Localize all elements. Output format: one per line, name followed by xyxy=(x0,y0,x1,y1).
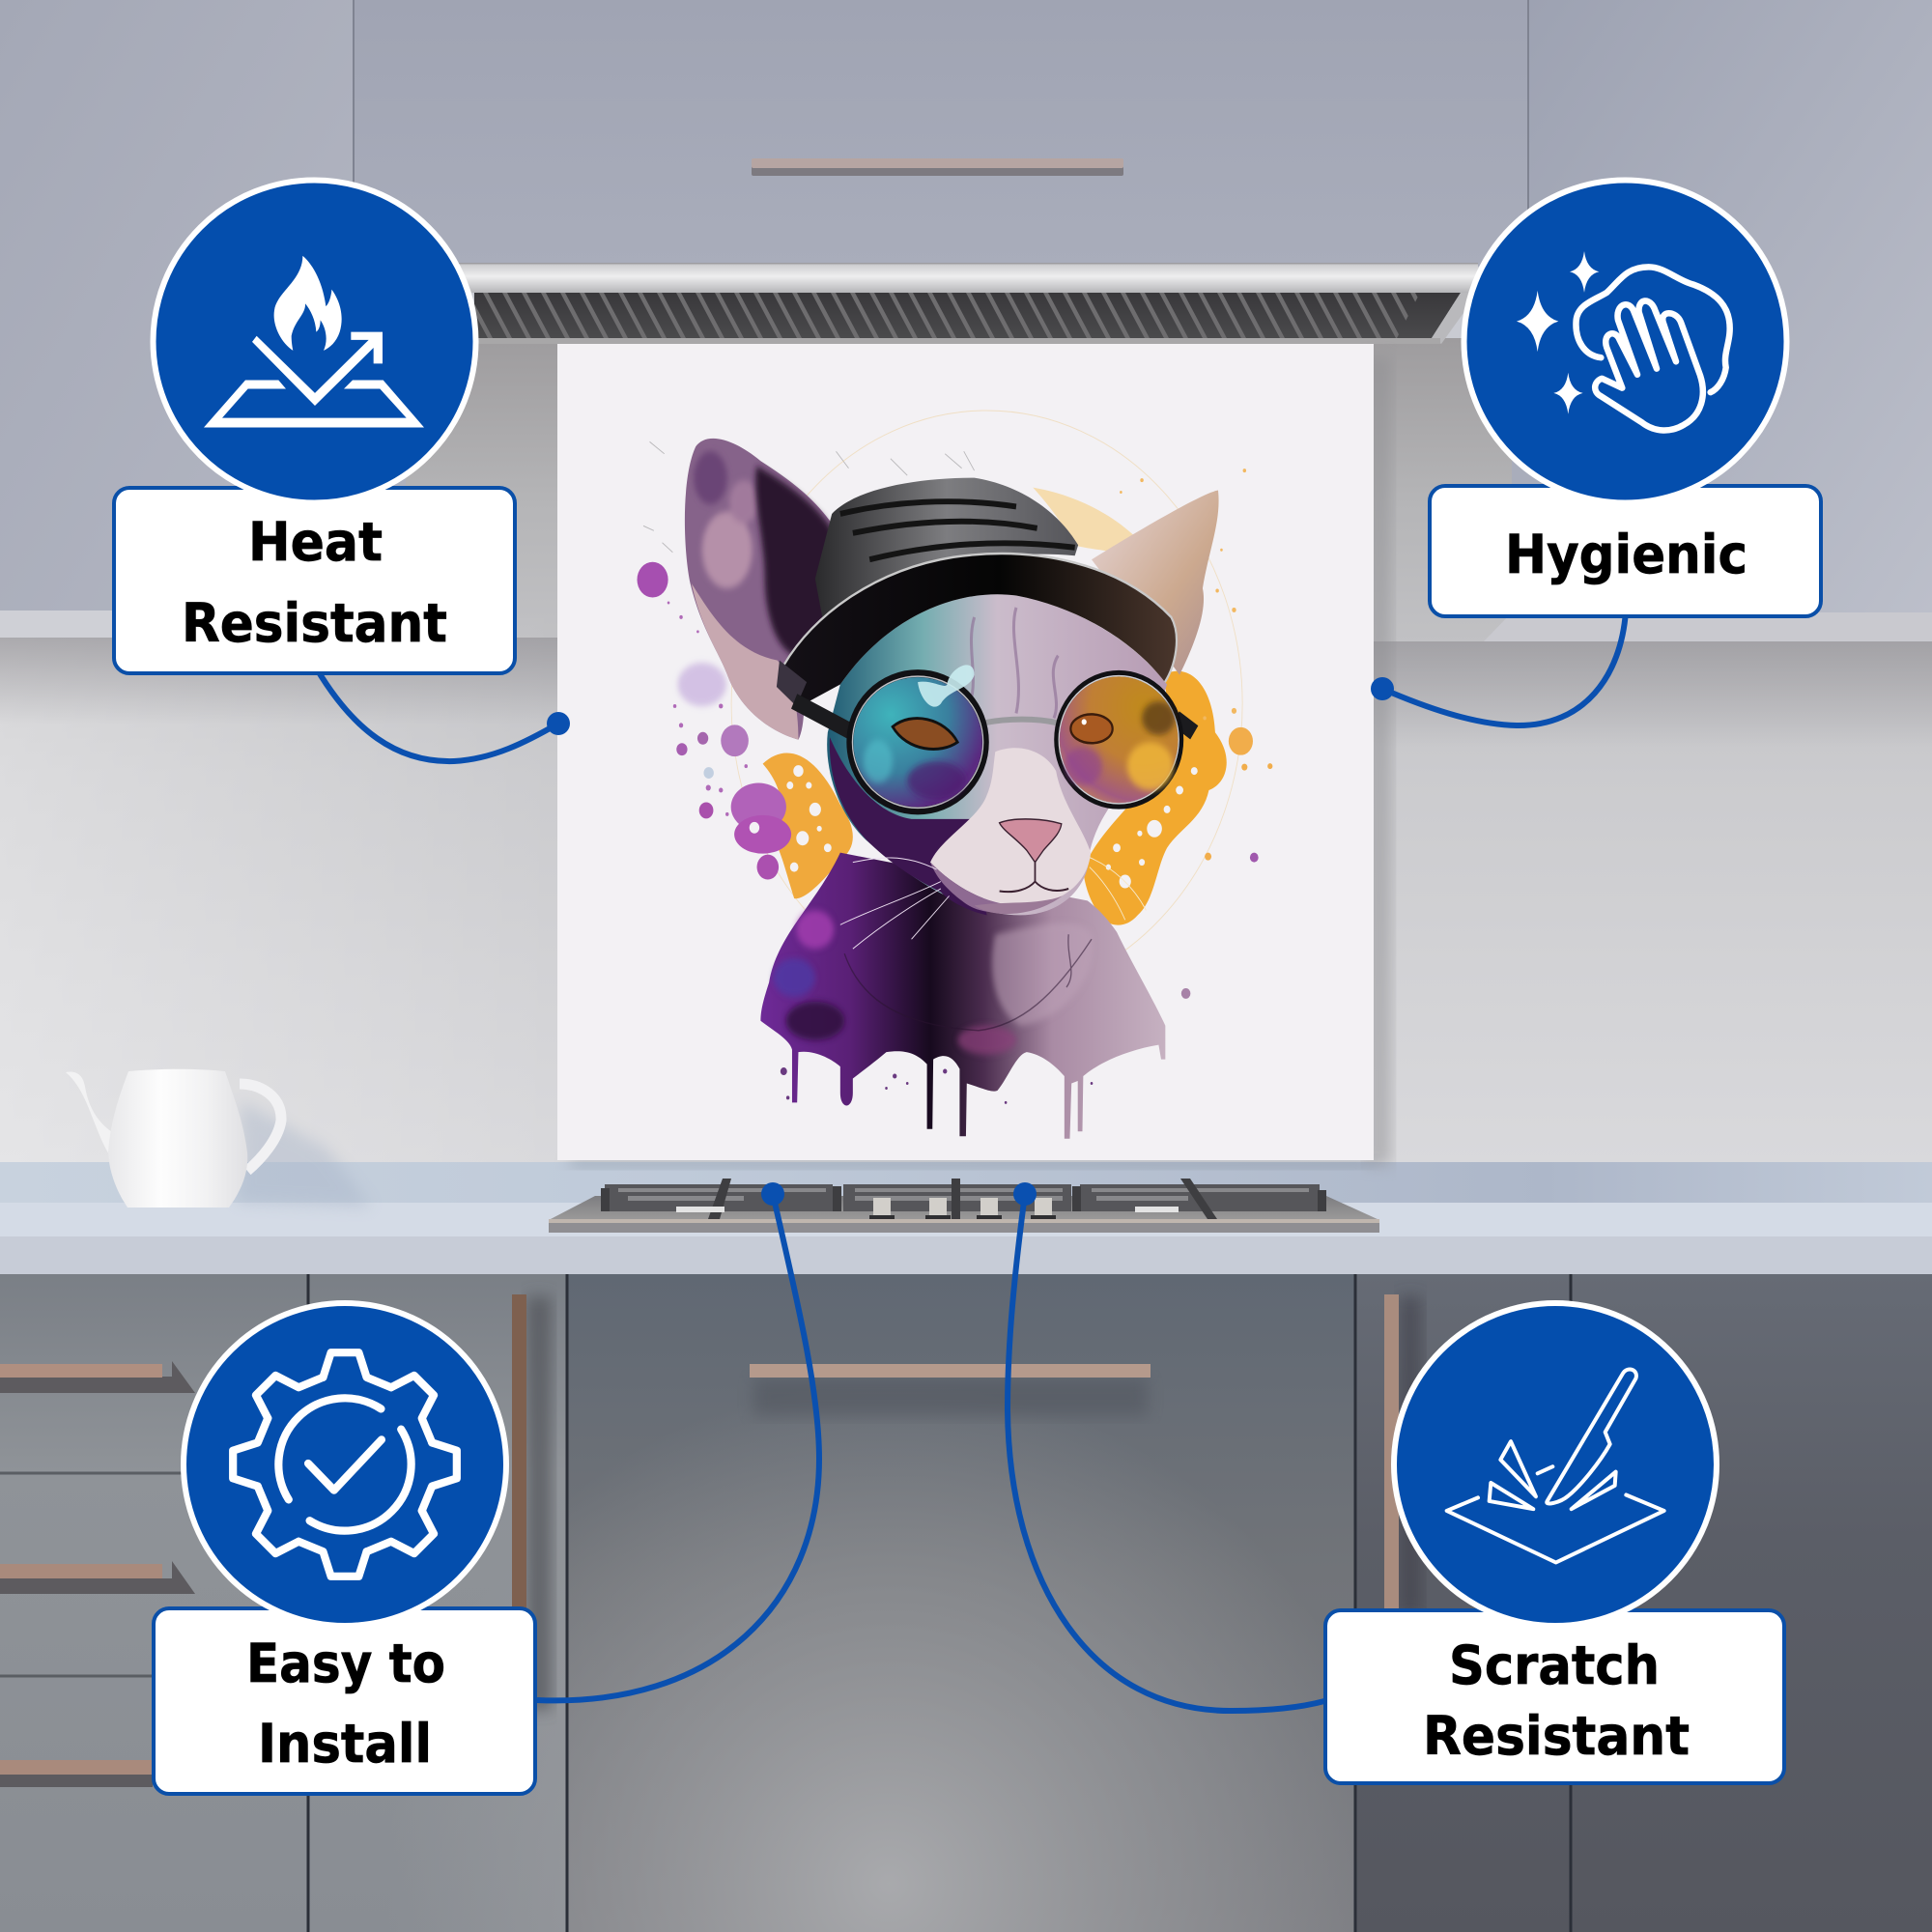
small splatter xyxy=(668,601,748,816)
lens glare xyxy=(918,665,975,707)
feature: scratch resistant xyxy=(1325,1303,1784,1783)
connector: scratch resistant xyxy=(1008,1182,1324,1711)
temple arms xyxy=(794,701,1194,732)
teapot xyxy=(66,1069,372,1208)
badge circle xyxy=(153,180,475,502)
paint dots xyxy=(638,469,1272,999)
body mottling xyxy=(773,910,1093,1055)
mouth xyxy=(1000,863,1068,892)
badge circle xyxy=(1394,1303,1717,1626)
shadow beneath right shelf xyxy=(1374,641,1932,723)
burner grates xyxy=(605,1184,1320,1211)
label text line 2: Resistant xyxy=(182,592,447,654)
label text: Hygienic xyxy=(1505,524,1747,585)
lower-left cheek shadow xyxy=(830,737,987,915)
knob bases xyxy=(869,1215,1056,1219)
cabinet seams xyxy=(353,0,1529,210)
shelf strip right xyxy=(1484,612,1932,641)
muzzle xyxy=(930,748,1091,905)
inner ear shadow xyxy=(755,466,846,656)
hat crown xyxy=(815,478,1078,646)
connector: easy to install xyxy=(537,1182,819,1700)
whiskers xyxy=(840,858,1146,949)
control knobs xyxy=(873,1198,1052,1215)
grate highlights xyxy=(618,1188,1309,1201)
left lens xyxy=(850,673,985,810)
wall xyxy=(0,338,1932,1169)
drawer handles left xyxy=(0,1361,195,1787)
right eye xyxy=(1070,714,1113,743)
floor sheen xyxy=(547,1448,1296,1932)
base seams xyxy=(308,1274,1571,1932)
upper cabinet right xyxy=(1529,0,1932,612)
connector: heat resistant xyxy=(316,668,570,761)
right ear xyxy=(1092,491,1219,675)
right lens xyxy=(1057,673,1180,806)
label box xyxy=(114,488,515,673)
base cabinet centre xyxy=(567,1274,1355,1932)
feature: heat resistant xyxy=(114,180,515,673)
feature: easy to install xyxy=(154,1303,535,1794)
hat band xyxy=(777,661,807,706)
badge circle xyxy=(1464,180,1787,502)
vertical handle left xyxy=(512,1294,552,1710)
icon: knife scratching surface xyxy=(1447,1370,1664,1562)
cat artwork xyxy=(638,411,1272,1139)
left ear xyxy=(685,439,851,740)
head xyxy=(827,594,1167,915)
drip specks xyxy=(781,1067,1093,1104)
glasses xyxy=(794,665,1194,810)
cooktop xyxy=(549,1179,1379,1233)
counter front xyxy=(0,1236,1932,1237)
ear mottling xyxy=(694,451,758,588)
hat brim xyxy=(783,554,1177,703)
label text: Heat xyxy=(248,511,383,573)
label text: Scratch xyxy=(1449,1634,1660,1696)
label box xyxy=(154,1608,535,1794)
splashback panel xyxy=(557,344,1391,1168)
forehead folds xyxy=(970,608,1058,718)
icon: flame on surface xyxy=(204,256,424,427)
ear fold xyxy=(692,583,798,740)
centre drawer handle xyxy=(750,1364,1151,1416)
grate uprights xyxy=(601,1179,1326,1219)
vertical handle right xyxy=(1384,1294,1422,1615)
feature: hygienic xyxy=(1430,180,1821,616)
left eye xyxy=(893,719,957,749)
label box xyxy=(1325,1610,1784,1783)
drawer seams xyxy=(0,1472,182,1677)
counter top xyxy=(0,1203,1932,1237)
badge circle xyxy=(184,1303,506,1626)
body with drips xyxy=(760,853,1165,1139)
label box xyxy=(1430,486,1821,616)
shelf strip left xyxy=(0,611,112,618)
icon: hand wiping with sparkles xyxy=(1517,251,1730,430)
extractor hood xyxy=(454,263,1478,344)
label text line 2: Install xyxy=(258,1713,432,1775)
counter back xyxy=(0,1162,1932,1204)
base cabinet left xyxy=(0,1274,567,1932)
nose xyxy=(1000,819,1062,863)
icon: gear with check xyxy=(233,1352,457,1577)
lens mottling xyxy=(864,740,966,800)
lens tint xyxy=(1065,701,1176,790)
upper cabinet left xyxy=(0,0,354,611)
label text line 2: Resistant xyxy=(1423,1705,1690,1767)
orange paint halo xyxy=(731,411,1242,997)
label text: Easy to xyxy=(246,1633,445,1694)
upper cabinet centre xyxy=(355,0,1528,267)
fine spray lines xyxy=(643,441,975,553)
neck folds xyxy=(844,934,1092,1031)
cabinet handle top xyxy=(752,158,1123,176)
connector: hygienic xyxy=(1371,611,1626,725)
shadow beneath left shelf xyxy=(0,638,557,709)
base cabinet right xyxy=(1355,1274,1932,1932)
hat xyxy=(777,478,1177,706)
